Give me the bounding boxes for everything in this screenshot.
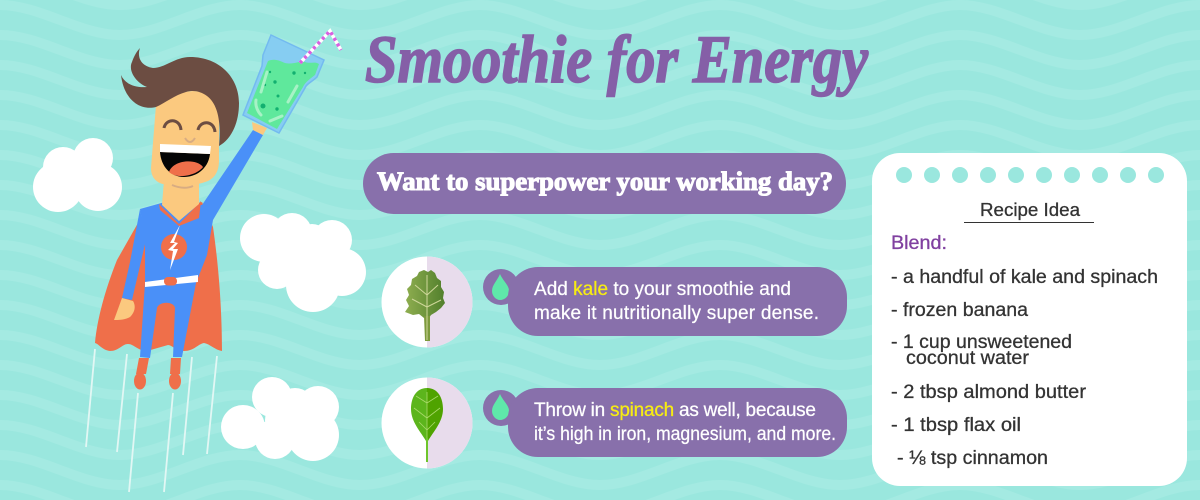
nose (185, 138, 195, 142)
binder dots (896, 167, 1164, 183)
icon: spinach leaf (411, 388, 443, 462)
ingredients list: coconut water (906, 347, 1030, 369)
eyes (164, 121, 215, 132)
kale row (382, 256, 847, 348)
raised hand (252, 122, 267, 135)
ingredients list: - 2 tbsp almond butter (891, 381, 1087, 403)
cloud: upper left (33, 138, 122, 212)
title: Smoothie for Energy (365, 21, 869, 97)
speed lines (86, 349, 217, 492)
highlights (256, 72, 297, 121)
ingredients list: - ⅛ tsp cinnamon (897, 447, 1048, 469)
cloud: lower (221, 377, 339, 461)
bolt (168, 225, 180, 270)
recipe card (872, 153, 1187, 486)
belt (145, 275, 198, 287)
drop badge (483, 269, 519, 305)
spinach circle (382, 378, 473, 468)
neck (162, 180, 199, 221)
emblem (161, 234, 187, 260)
ingredients list: - a handful of kale and spinach (891, 266, 1158, 288)
ingredients list (891, 266, 1158, 469)
buckle (164, 277, 177, 286)
recipe heading (964, 200, 1094, 223)
tongue (169, 161, 203, 176)
collar (159, 201, 201, 226)
kale bubble: Add kale to your smoothie and (534, 279, 791, 300)
recipe heading: Recipe Idea (980, 200, 1081, 220)
ingredients list: - 1 tbsp flax oil (891, 414, 1021, 436)
kale circle (382, 256, 473, 348)
bubbles (260, 71, 306, 111)
liquid (247, 60, 319, 129)
question banner: Want to superpower your working day? (377, 167, 833, 196)
mouth (160, 152, 210, 177)
smoothie glass (243, 31, 341, 133)
neck shadow (172, 185, 193, 188)
blend label: Blend: (891, 232, 947, 254)
icon: kale leaf (405, 270, 445, 341)
kale bubble: make it nutritionally super dense. (534, 303, 819, 324)
teeth (160, 144, 211, 154)
spinach bubble (508, 388, 847, 457)
kale bubble (508, 267, 847, 336)
ingredients list: - 1 cup unsweetened (891, 331, 1072, 353)
straw (300, 31, 341, 63)
legs and torso (140, 130, 263, 358)
superhero (95, 48, 267, 390)
ingredients list: - frozen banana (891, 299, 1028, 321)
face (151, 91, 219, 186)
spinach bubble: Throw in spinach as well, because (534, 400, 816, 421)
left arm (122, 209, 146, 300)
left hand (114, 298, 135, 320)
glass body (243, 35, 324, 133)
hair (121, 48, 239, 146)
cloud: middle (240, 213, 366, 312)
spinach row (382, 378, 847, 468)
straw stripes (300, 31, 341, 63)
drop badge (483, 390, 519, 426)
cape (95, 202, 222, 351)
boots (134, 358, 181, 390)
question banner (363, 153, 846, 214)
spinach bubble: it’s high in iron, magnesium, and more. (534, 424, 836, 445)
